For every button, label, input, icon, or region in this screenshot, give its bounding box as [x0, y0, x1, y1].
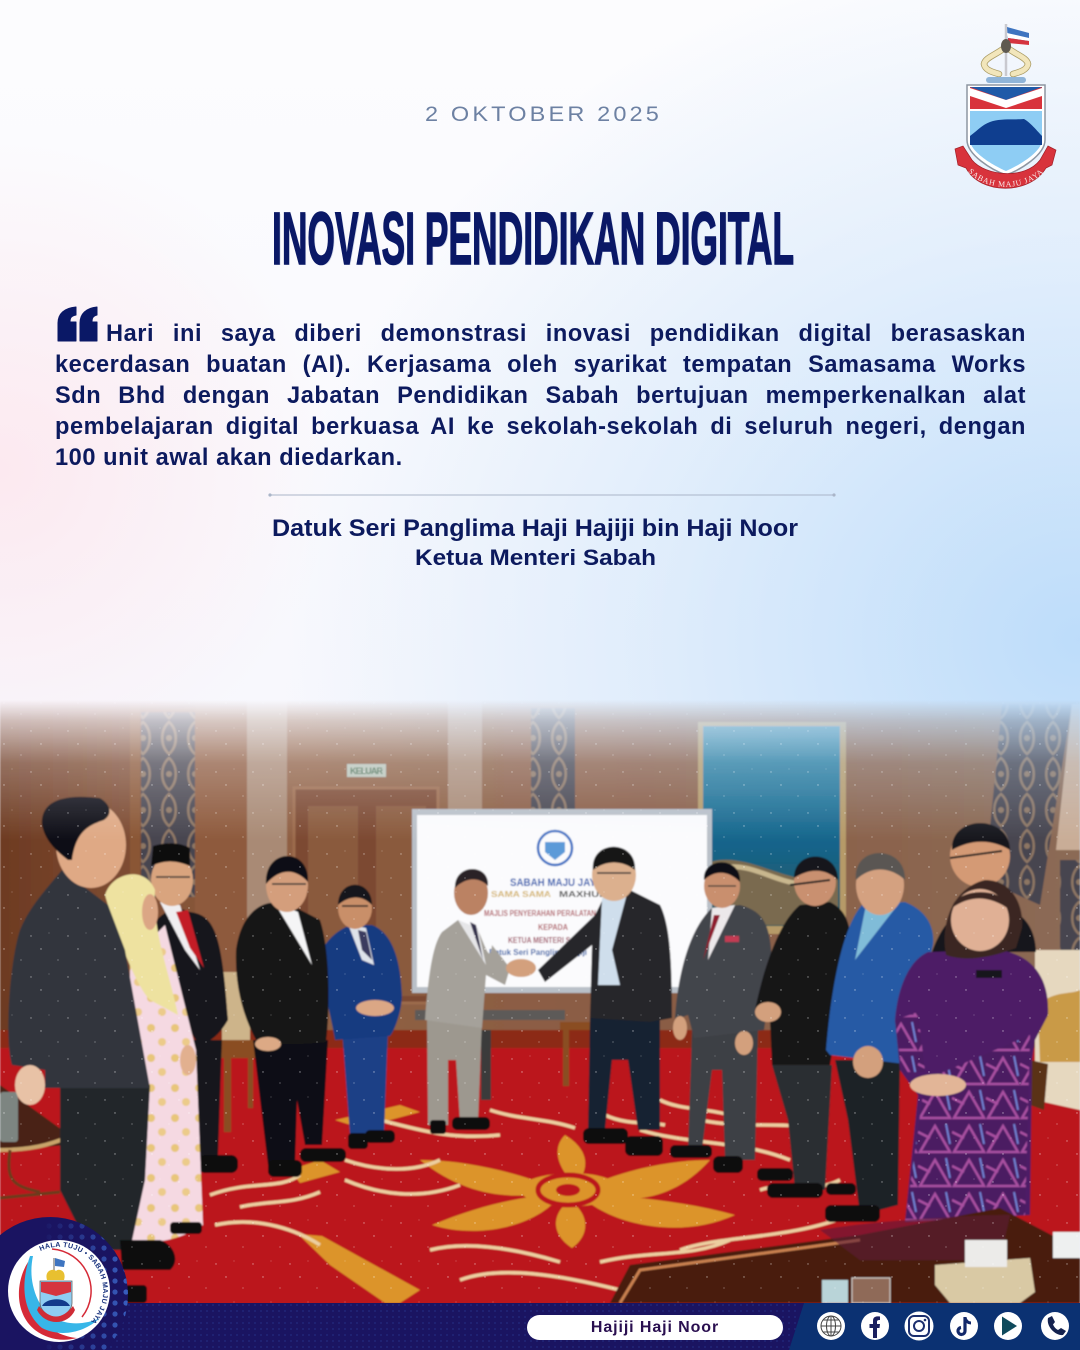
- speaker name: Datuk Seri Panglima Haji Hajiji bin Haji Noor: [272, 515, 798, 542]
- icon: phone: [1041, 1312, 1069, 1340]
- title: [272, 197, 795, 281]
- person 3 songkok: [151, 843, 238, 1173]
- quote text: Sdn Bhd dengan Jabatan Pendidikan Sabah bertujuan memperkenalkan alat: [55, 383, 1026, 409]
- handshake: [506, 959, 536, 977]
- person 10 blue blazer: [825, 853, 933, 1222]
- person 1 dark suit: [8, 797, 175, 1303]
- presentation screen: MAJLIS PENYERAHAN PERALATAN: [484, 909, 596, 918]
- speaker role: Ketua Menteri Sabah: [415, 545, 656, 570]
- presentation screen: KETUA MENTERI SABAH: [508, 936, 590, 945]
- armchair: [222, 972, 250, 1052]
- exit sign: [347, 764, 386, 777]
- carpet: [0, 1047, 1080, 1303]
- mini crest: [37, 1258, 75, 1322]
- quote text: kecerdasan buatan (AI). Kerjasama oleh syarikat tempatan Samasama Works: [55, 352, 1026, 378]
- quote text: pembelajaran digital berkuasa AI ke sekolah-sekolah di seluruh negeri, dengan: [55, 414, 1026, 440]
- person 12 behind (glasses): [932, 823, 1036, 952]
- divider: [268, 493, 836, 497]
- icon: quotation mark: [58, 307, 97, 341]
- person 5 navy suit: [322, 885, 402, 1149]
- icon: instagram: [904, 1312, 934, 1340]
- person 8 grey suit: [670, 862, 772, 1173]
- person 6 grey suit: chief minister: [425, 869, 510, 1134]
- icon: youtube play: [994, 1312, 1022, 1340]
- quote text: 100 unit awal akan diedarkan.: [55, 445, 403, 471]
- icon: globe: [817, 1312, 845, 1340]
- sofa right: [1035, 950, 1080, 1110]
- wall pillars: [246, 711, 288, 919]
- carved panels: [141, 712, 195, 897]
- quote text: Hari ini saya diberi demonstrasi inovasi pendidikan digital berasaskan: [106, 321, 1026, 347]
- exit sign: KELUAR: [350, 766, 384, 776]
- quote text: [55, 321, 1026, 471]
- door: [294, 788, 438, 1003]
- presentation screen: SABAH MAJU JAYA: [510, 877, 602, 889]
- date: 2 OKTOBER 2025: [425, 103, 662, 126]
- crest: Sabah coat of arms: [954, 24, 1056, 189]
- left side table: [0, 1084, 62, 1149]
- presentation screen: SAMA SAMA: [491, 890, 551, 899]
- icon: facebook: [861, 1312, 889, 1340]
- far-side table and stand: [415, 1010, 565, 1020]
- name pill: [527, 1315, 783, 1340]
- presentation screen: Datuk Seri Panglima Hajiji: [489, 948, 587, 957]
- icon: tiktok: [950, 1312, 978, 1340]
- carpet medallion: [290, 1105, 735, 1303]
- presentation screen: MAXHUB: [559, 889, 607, 899]
- glass coffee table: [610, 1208, 1080, 1303]
- badge: Hala Tuju Sabah Maju Jaya: [0, 1217, 128, 1350]
- badge: Hala Tuju Sabah Maju Jaya: HALA TUJU • SABAH MAJU JAYA: [39, 1242, 108, 1324]
- person 11 purple dress: [895, 880, 1048, 1222]
- painting: [698, 722, 846, 934]
- presentation screen: [412, 809, 712, 993]
- name pill: Hajiji Haji Noor: [591, 1319, 719, 1336]
- person 9 black jacket: [755, 856, 850, 1198]
- person 7 black blazer: [538, 847, 672, 1156]
- footer bar: [0, 1303, 1080, 1350]
- person 4 black suit: [236, 856, 346, 1177]
- presentation screen: KEPADA: [538, 923, 568, 932]
- person 2 hijab floral dress: [105, 874, 203, 1242]
- crest: Sabah coat of arms: SABAH MAJU JAYA: [968, 168, 1043, 187]
